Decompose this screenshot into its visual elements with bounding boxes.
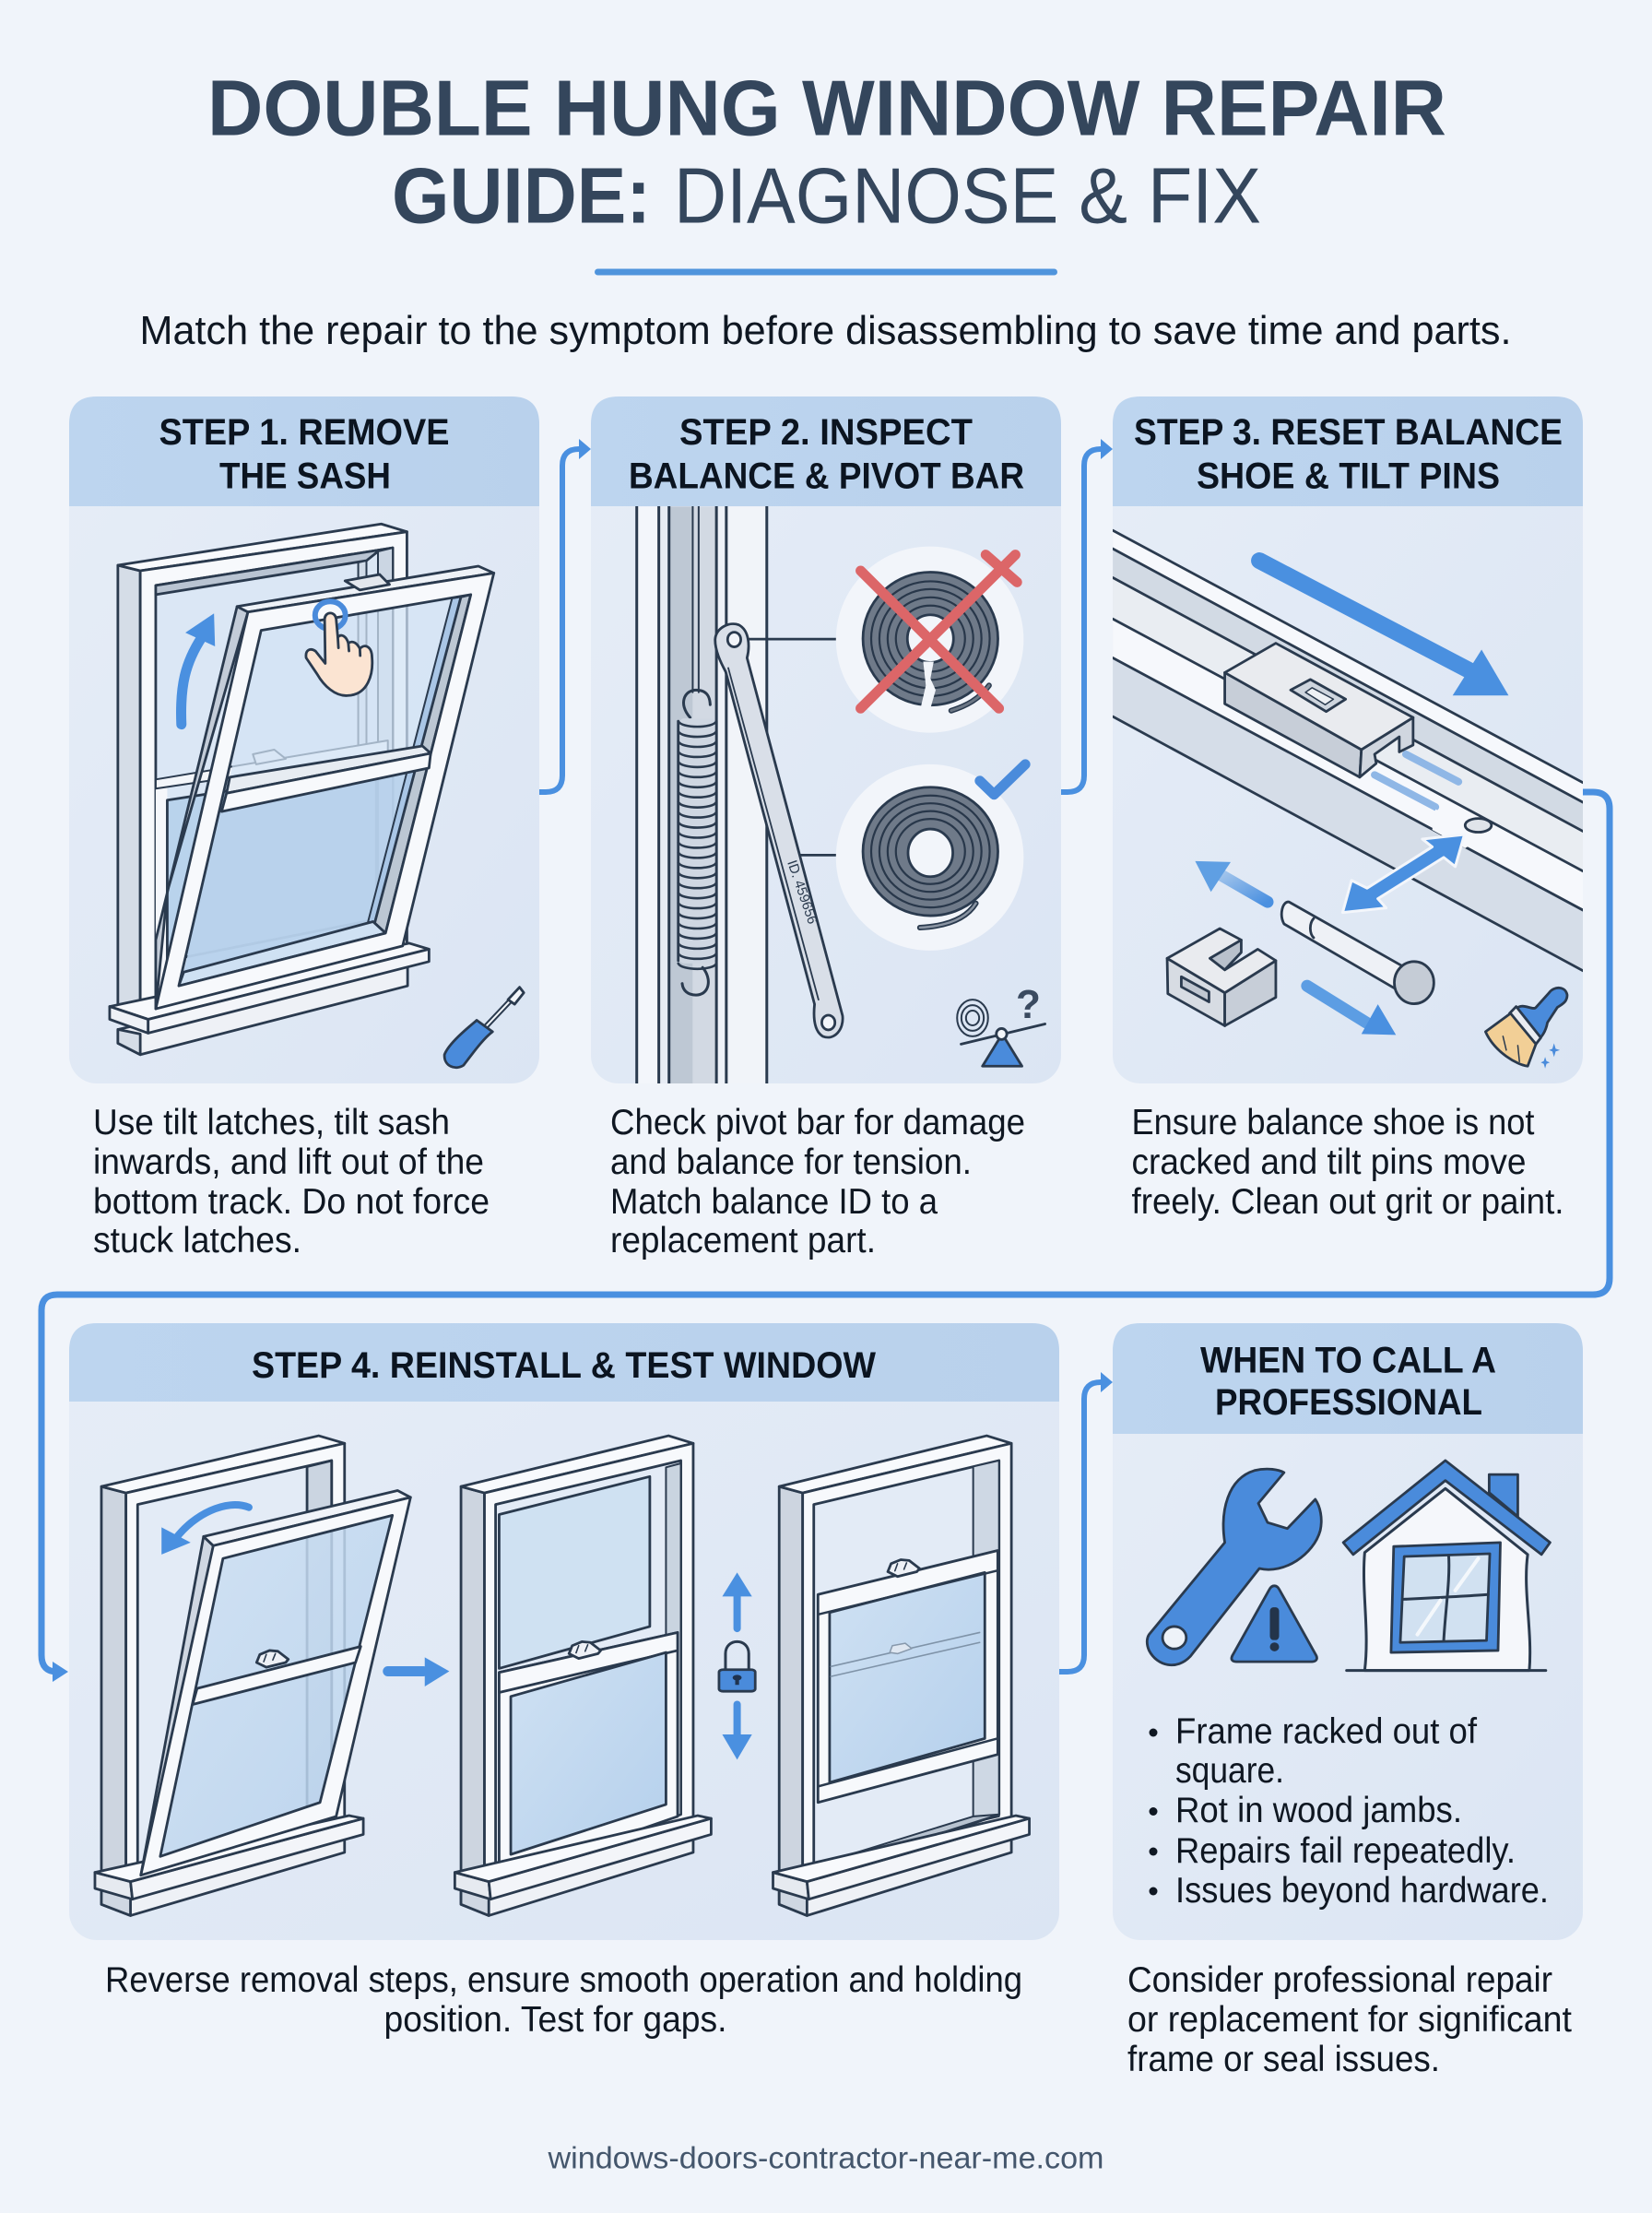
icon: warning triangle [1232,1586,1316,1662]
arrow: left [1195,861,1268,902]
caption: step 2: Check pivot bar for damage [610,1103,1025,1142]
arrow: up [722,1572,752,1628]
header: step 1 [69,396,539,506]
checklist: reasons to call: Repairs fail repeatedly. [1175,1831,1516,1871]
header: step 4: STEP 4. REINSTALL & TEST WINDOW [252,1345,876,1386]
panel: step 3 [1113,396,1583,1083]
caption: professional: frame or seal issues. [1127,2040,1440,2079]
tilt pin [1281,902,1434,1004]
caption: step 3: Ensure balance shoe is not [1132,1103,1535,1142]
caption: step 3: freely. Clean out grit or paint. [1132,1182,1564,1222]
title: DIAGNOSE & FIX [674,153,1261,240]
arrow: down right [1307,986,1396,1035]
illustration: balance and pivot bar [637,506,1045,1083]
window: closed [454,1436,711,1915]
header: step 3 [1113,396,1583,506]
divider [595,269,1057,275]
header: step 2 [591,396,1061,506]
caption: step 4 [105,1960,1022,2040]
footer url: windows-doors-contractor-near-me.com [547,2141,1104,2174]
window: tilting sash back in [95,1436,410,1915]
arrow: step 3 to step 4 [41,792,1610,1682]
caption: step 2: replacement part. [610,1221,876,1260]
header: step 1: STEP 1. REMOVE [159,412,450,453]
red cross [861,555,1017,708]
label: balance id: ID. 459656 [784,858,820,926]
checklist: reasons to call: Issues beyond hardware. [1175,1871,1549,1911]
caption: step 1 [93,1103,490,1260]
caption: step 1: Use tilt latches, tilt sash [93,1103,450,1142]
icon: damaged coil balance [836,547,1023,733]
checklist: reasons to call: Rot in wood jambs. [1175,1791,1462,1830]
checklist: reasons to call: Frame racked out of [1175,1711,1477,1752]
window track [1113,530,1583,971]
checklist: reasons to call: square. [1175,1751,1284,1791]
highlight bars [1375,754,1458,807]
arrow: curved [176,1505,249,1539]
icon: house with racked window [1343,1461,1550,1671]
pin hole [1433,810,1492,848]
caption: step 1: bottom track. Do not force [93,1182,490,1222]
extension spring [678,506,716,995]
caption: professional: or replacement for significant [1127,2000,1572,2040]
illustration: tilted window sash [110,524,524,1068]
header: step 4 [69,1323,1059,1402]
header: professional: PROFESSIONAL [1215,1382,1482,1423]
panel: when to call a professional [1113,1323,1583,1940]
jamb track [637,506,767,1083]
caption: professional: Consider professional repair [1127,1960,1552,2000]
caption: step 2: and balance for tension. [610,1142,972,1182]
pivot bar [715,624,843,1037]
arrow: next state [388,1657,449,1686]
header: step 2: STEP 2. INSPECT [679,412,973,453]
caption: step 4: Reverse removal steps, ensure smooth operation and holding [105,1960,1022,2000]
panel: step 4 [69,1323,1059,1940]
subtitle: Match the repair to the symptom before disassembling to save time and parts. [140,308,1512,353]
arrow: slide direction [1259,561,1508,695]
header: step 2: BALANCE & PIVOT BAR [629,456,1024,496]
header: step 3: STEP 3. RESET BALANCE [1134,412,1563,453]
panel: step 1 [69,396,539,1083]
arrow: step 2 to step 3 [1061,439,1113,792]
tilted sash [156,566,494,1009]
balance shoe part [1167,929,1276,1025]
icon: cleaning brush [1485,988,1567,1069]
header: professional: WHEN TO CALL A [1200,1341,1496,1381]
icon: good coil balance [836,764,1025,951]
caption: step 1: inwards, and lift out of the [93,1142,484,1182]
icon: balance tension scale [957,1000,1045,1066]
checklist: reasons to call [1149,1711,1549,1911]
caption: step 4: position. Test for gaps. [384,2000,726,2040]
caption: step 3 [1132,1103,1564,1222]
arrow: step 4 to professional [1059,1372,1113,1672]
panel: step 2 [591,396,1061,1083]
leader lines [742,639,837,855]
header: step 3: SHOE & TILT PINS [1197,456,1500,496]
arrow: down [722,1704,752,1759]
balance shoe [1225,644,1413,777]
caption: professional [1127,1960,1572,2079]
window: open [773,1436,1030,1915]
icon: wrench [1147,1469,1321,1665]
icon: hand pressing latch [306,601,372,695]
arrow: step 1 to step 2 [539,439,591,792]
header: step 1: THE SASH [219,456,391,496]
header: professional [1113,1323,1583,1434]
icon: padlock [719,1641,755,1691]
label: question mark: ? [1016,982,1041,1027]
title [207,65,1446,240]
caption: step 1: stuck latches. [93,1221,301,1260]
icon: curved tilt arrow [181,613,215,725]
arrow: double headed [1342,834,1465,913]
caption: step 3: cracked and tilt pins move [1132,1142,1527,1182]
icon: screwdriver [444,988,524,1068]
illustration: balance shoe in track [1113,530,1583,1069]
title: GUIDE: [392,153,651,240]
caption: step 2 [610,1103,1025,1260]
caption: step 2: Match balance ID to a [610,1182,938,1222]
checkmark [980,764,1025,795]
title: DOUBLE HUNG WINDOW REPAIR [207,65,1446,153]
